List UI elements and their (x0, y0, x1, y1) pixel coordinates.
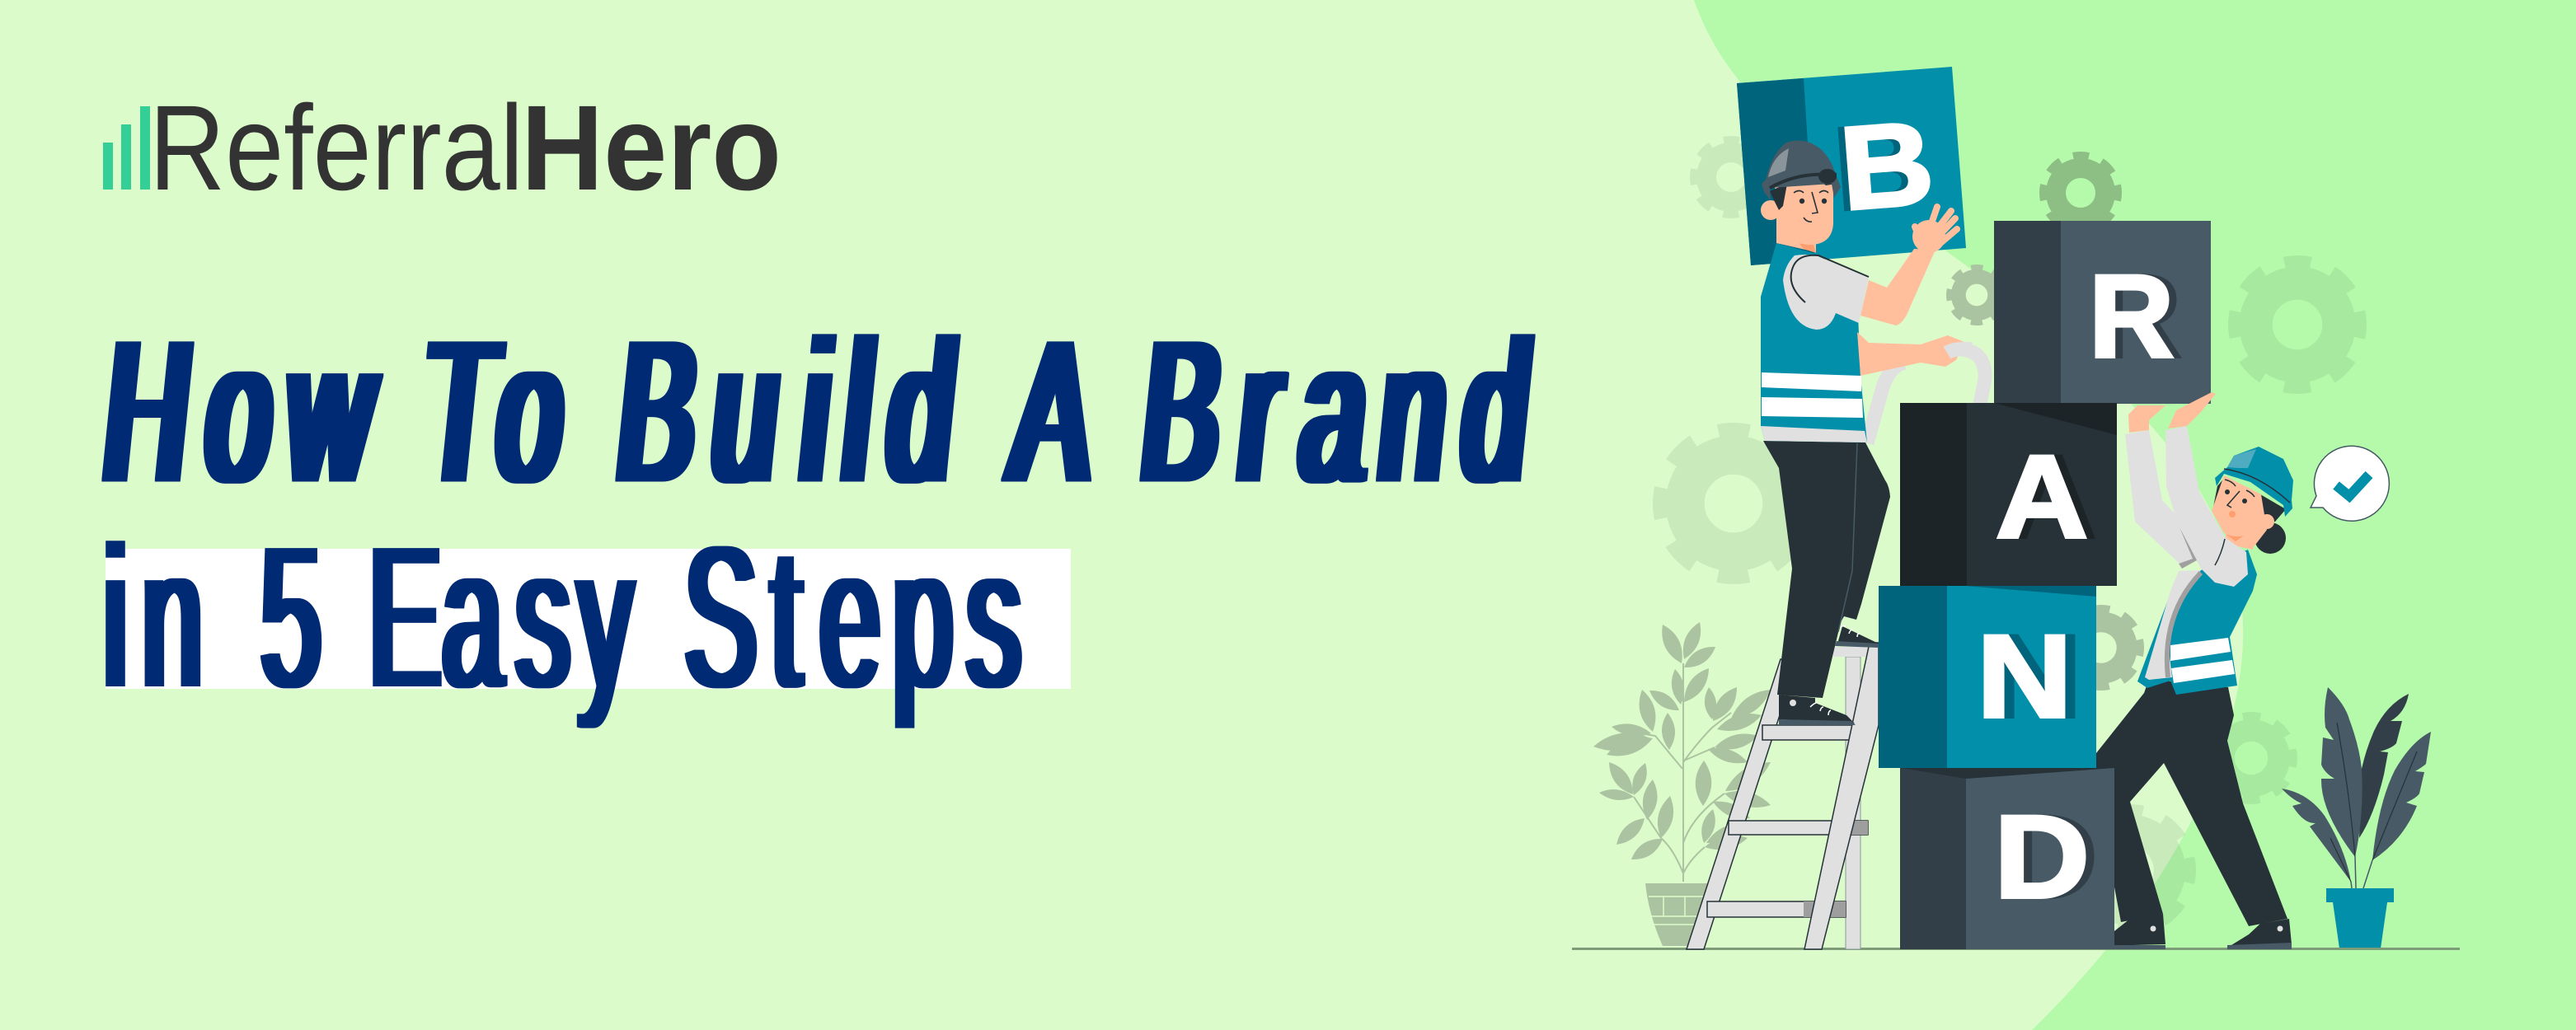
man pants (1763, 441, 1890, 698)
plant stems (2351, 857, 2372, 888)
man neck shadow (1795, 237, 1816, 253)
woman hands (2128, 392, 2216, 433)
man face details (1799, 199, 1827, 204)
man upper arm (1860, 249, 1936, 325)
title highlight box (106, 549, 1071, 689)
block D: D (1994, 792, 2090, 923)
ground line (1572, 948, 2460, 950)
ladder (1687, 349, 1985, 949)
ladder right rail (1804, 643, 1879, 949)
man hand (1912, 207, 1957, 253)
block A: A (1996, 432, 2088, 563)
plant stems (1616, 663, 1731, 882)
leaf veins (2330, 723, 2417, 882)
woman upper body (2125, 392, 2293, 695)
man lower shoe (1779, 695, 1855, 723)
block A (1900, 403, 2117, 586)
woman vest (2137, 550, 2257, 695)
woman arms (2125, 430, 2197, 564)
ladder top step (1833, 647, 1879, 657)
title line 2: in 5 Easy Steps (103, 504, 1021, 729)
logo (103, 81, 781, 216)
block D (1900, 768, 2114, 949)
woman vest stripes (2170, 638, 2235, 683)
speech bubble with check (2311, 446, 2389, 521)
block B: B (1836, 97, 1938, 235)
man vest (1761, 243, 1867, 442)
block N: N (1977, 611, 2072, 742)
block B: B (1829, 98, 1931, 236)
man upper shoe (1837, 626, 1879, 645)
logo bars icon (103, 106, 150, 190)
left potted plant (1593, 622, 1771, 946)
vest stripes (1762, 372, 1863, 418)
block B (1737, 67, 1966, 265)
ladder left rail (1687, 659, 1798, 949)
plant pot (2326, 888, 2394, 948)
logo wordmark: Referral (149, 81, 523, 216)
woman pants and shoes (2096, 679, 2292, 949)
ladder handle grip (1947, 349, 1972, 353)
plant pot (1645, 883, 1710, 946)
block A: A (2004, 432, 2096, 563)
block R: R (2089, 251, 2174, 382)
woman torso (2145, 570, 2201, 680)
background gears (1647, 133, 2372, 940)
man shirt (1783, 255, 1869, 330)
block R (1994, 221, 2211, 404)
ladder steps (1707, 725, 1871, 917)
plant leaves (2359, 694, 2409, 838)
woman bun and hair (2255, 522, 2286, 554)
man lower body (1763, 441, 1890, 725)
man head (1761, 140, 1841, 253)
woman face details (2225, 489, 2247, 503)
plant leaves (1593, 622, 1771, 859)
woman shoes (2101, 914, 2292, 948)
right potted plant (2282, 687, 2431, 948)
block N (1879, 586, 2096, 768)
man upper body (1761, 140, 1972, 442)
ladder upper rail and handle (1867, 349, 1985, 443)
icon: check mark (2336, 475, 2369, 496)
block N: N (1987, 611, 2082, 742)
logo wordmark: Hero (521, 81, 781, 216)
block D: D (2002, 792, 2098, 923)
man hair (1770, 171, 1837, 210)
woman pants (2096, 679, 2287, 926)
woman face (2212, 475, 2267, 548)
hard hat (1762, 140, 1841, 200)
ladder back post (1846, 657, 1860, 949)
man lower arm (1857, 332, 1964, 376)
block R: R (2096, 251, 2181, 382)
woman hard hat (2215, 447, 2293, 517)
title line 1: How To Build A Brand (96, 300, 1539, 524)
woman neck (2226, 531, 2255, 550)
